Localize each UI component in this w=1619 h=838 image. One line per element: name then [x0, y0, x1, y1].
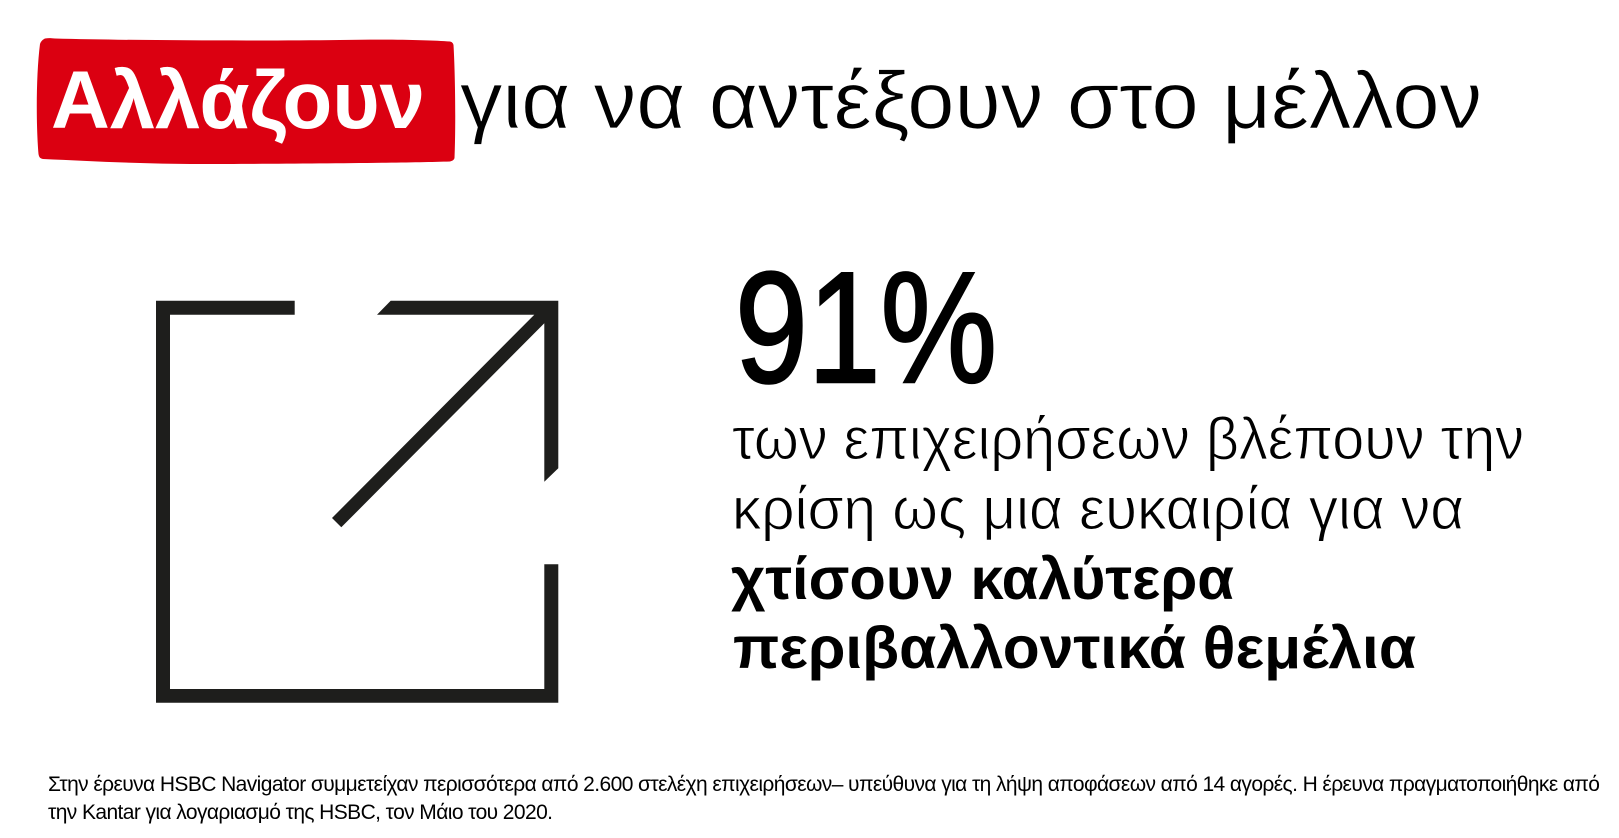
footnote	[48, 773, 1600, 824]
description line 1: των επιχειρήσεων βλέπουν την	[732, 406, 1524, 472]
statistic: 91%: 91%	[735, 240, 997, 416]
title	[37, 38, 1482, 164]
description line 4 (bold): περιβαλλοντικά θεμέλια	[733, 615, 1416, 681]
title highlight: red badge	[37, 38, 455, 164]
description line 3 (bold): χτίσουν καλύτερα	[731, 546, 1234, 612]
statistic description	[731, 406, 1524, 681]
footnote line 1: Στην έρευνα HSBC Navigator συμμετείχαν περισσότερα από 2.600 στελέχη επιχειρήσεων– υπεύθυνα για τη λήψη αποφάσεων από 14 αγορές. Η έρευνα πραγματοποιήθηκε από	[48, 773, 1600, 796]
footnote line 2: την Kantar για λογαριασμό της HSBC, τον Μάιο του 2020.	[48, 801, 553, 824]
icon: arrow breaking out of a square	[156, 301, 558, 703]
title highlight word: Αλλάζουν	[51, 55, 425, 146]
description line 2: κρίση ως μια ευκαιρία για να	[732, 476, 1464, 542]
title remainder: για να αντέξουν στο μέλλον	[460, 56, 1482, 146]
